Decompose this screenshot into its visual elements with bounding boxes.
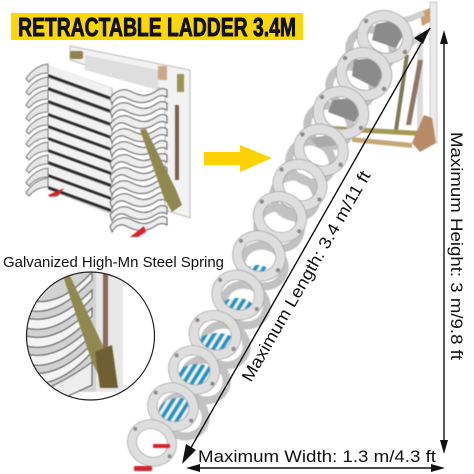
extended ladder xyxy=(126,2,437,471)
front rings xyxy=(126,8,415,468)
red feet xyxy=(134,444,170,471)
folded ladder photo xyxy=(26,46,190,237)
arrow: maximum length xyxy=(182,28,430,464)
spring detail circle xyxy=(26,272,156,400)
title: RETRACTABLE LADDER 3.4M xyxy=(18,12,296,42)
gray treads xyxy=(310,20,404,148)
title banner xyxy=(11,12,303,42)
label: maximum height: Maximum Height: 3 m/9.8 ft xyxy=(447,132,466,360)
back rings xyxy=(156,23,399,443)
wall mount xyxy=(332,2,437,152)
blue striped treads xyxy=(159,265,268,426)
label: maximum length: Maximum Length: 3.4 m/11 ft xyxy=(238,167,375,385)
arrow: maximum width xyxy=(186,464,445,472)
spring caption: Galvanized High-Mn Steel Spring xyxy=(3,255,224,271)
arrow: maximum height xyxy=(440,30,448,454)
yellow arrow xyxy=(204,145,272,172)
label: maximum width: Maximum Width: 1.3 m/4.3 ft xyxy=(198,447,436,466)
